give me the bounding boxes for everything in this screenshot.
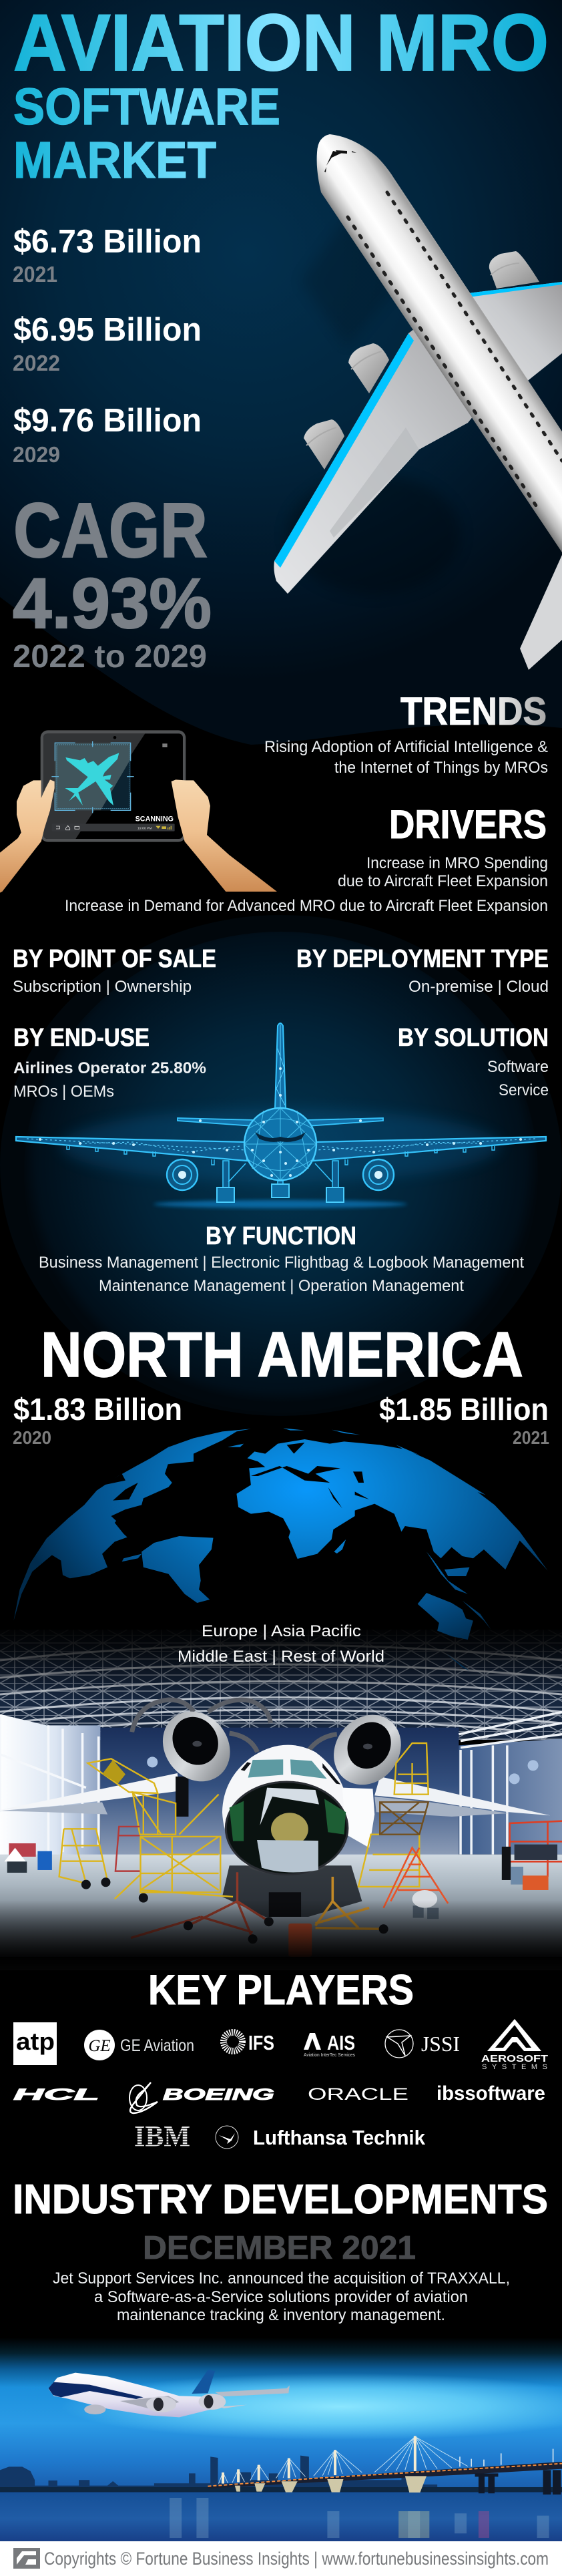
engine 3	[304, 419, 344, 470]
inland seas	[104, 1443, 369, 1523]
panel: by solution	[398, 1024, 549, 1099]
left hand and arm	[0, 779, 55, 893]
right wall	[459, 1738, 562, 1855]
title line 2: SOFTWARE	[13, 78, 280, 136]
CAGR block	[13, 487, 212, 675]
CAGR period: 2022 to 2029	[13, 639, 207, 675]
dominant share: Airlines Operator 25.80%	[13, 1059, 206, 1077]
logo: Aerosoft Systems: SYSTEMS	[482, 2063, 547, 2071]
airliner wing	[120, 2396, 179, 2410]
cream bridge piers	[235, 2476, 427, 2493]
tablet screen	[43, 733, 183, 839]
tablet status icons	[156, 826, 172, 830]
main wings	[16, 1137, 546, 1161]
orange ladder	[384, 1848, 448, 1908]
value 2029: $9.76 Billion	[13, 403, 202, 439]
fuselage nose	[222, 1745, 348, 1875]
driver text line 3: Increase in Demand for Advanced MRO due to Aircraft Fleet Expansion	[65, 897, 548, 915]
logo: HCL: HCL	[13, 2086, 99, 2104]
deck lights	[208, 2464, 562, 2487]
heading: BY FUNCTION	[206, 1222, 356, 1250]
value 2021: $1.85 Billion	[379, 1392, 549, 1427]
title	[13, 0, 549, 189]
cockpit windows	[324, 150, 356, 172]
icon: glowing wireframe airplane	[16, 1023, 546, 1208]
title line 3: MARKET	[13, 132, 216, 189]
left wing	[0, 1773, 179, 1810]
lamp posts	[460, 2449, 553, 2466]
logo: Oracle: ORACLE	[308, 2085, 408, 2104]
warm reflection	[398, 2511, 429, 2538]
airliner	[48, 2370, 290, 2417]
left equipment	[4, 1843, 52, 1873]
cockpit side windows	[241, 1762, 340, 1785]
panel: industry developments	[13, 2177, 548, 2324]
left wall	[0, 1714, 100, 1865]
tablet nav bar	[52, 823, 175, 832]
market size figures	[13, 224, 202, 467]
trend text line 2: the Internet of Things by MROs	[334, 759, 548, 777]
fuselage	[317, 134, 562, 552]
hangar ceiling	[0, 1630, 562, 1740]
hangar interior scene	[0, 1700, 562, 1957]
logo: AIS: AIS	[327, 2031, 355, 2054]
yellow scaffold	[59, 1743, 429, 1899]
items: Subscription | Ownership	[13, 978, 192, 996]
development text line 2: a Software-as-a-Service solutions provider of aviation	[94, 2288, 468, 2306]
logo: Boeing: BOEING	[163, 2086, 274, 2104]
regional figures	[13, 1392, 549, 1448]
water	[0, 2491, 562, 2541]
aircraft jack left	[131, 1872, 269, 1939]
heading: BY END-USE	[13, 1024, 150, 1052]
purple reflection	[479, 2511, 489, 2538]
trend text line 1: Rising Adoption of Artificial Intelligence &	[264, 738, 548, 756]
orange canister	[288, 1923, 312, 1957]
logo: AIS: Aviation InterTec Services	[304, 2053, 355, 2058]
scan square	[55, 743, 131, 810]
panel: by end-use	[13, 1024, 206, 1101]
sky bright band	[61, 2373, 562, 2440]
item software: Software	[487, 1058, 549, 1076]
white cover	[412, 1890, 437, 1908]
panel: drivers	[65, 802, 548, 915]
development text line 1: Jet Support Services Inc. announced the acquisition of TRAXXALL,	[53, 2269, 510, 2287]
cabin windows lower row	[348, 217, 536, 506]
panel: trends	[264, 690, 548, 777]
regions line 1: Europe | Asia Pacific	[202, 1622, 361, 1640]
airliner stabilizer	[215, 2386, 290, 2396]
logo: atp: atp	[16, 2028, 55, 2055]
wall lights	[152, 1762, 533, 1779]
left steel columns	[0, 1716, 99, 1852]
left wing underside	[0, 1802, 107, 1815]
tail fin	[275, 1023, 286, 1109]
islands of Asia Pacific	[427, 1551, 491, 1671]
brown scaffold	[380, 1802, 429, 1835]
year 2022: 2022	[13, 351, 60, 375]
item service: Service	[499, 1081, 549, 1099]
left engine	[156, 1709, 237, 1784]
opened radome bay	[226, 1782, 348, 1875]
tablet frame	[41, 730, 186, 842]
aircraft jack right	[316, 1877, 384, 1929]
under fuselage shadow	[222, 1865, 362, 1917]
cabin windows upper row	[387, 192, 562, 461]
city skyline	[0, 2456, 562, 2493]
CAGR value: 4.93%	[13, 563, 212, 643]
floor	[0, 1855, 562, 1957]
right radome panel	[342, 1788, 374, 1848]
heading: drivers: DRIVERS	[389, 802, 547, 847]
red scaffold frame	[115, 1827, 139, 1871]
engine reverser doors	[132, 1700, 337, 1752]
dark bridge piers	[475, 2470, 561, 2495]
mesh nodes	[40, 1069, 521, 1175]
back wall	[100, 1728, 459, 1857]
engine 2	[348, 343, 389, 393]
South America	[142, 1536, 214, 1603]
Central America	[122, 1554, 142, 1561]
paint cans	[413, 1905, 439, 1919]
right wing underside	[374, 1797, 509, 1817]
airliner engine 1	[146, 2396, 176, 2412]
engine 1	[489, 251, 539, 289]
menu dots	[162, 744, 168, 747]
items line 1: Business Management | Electronic Flightbag & Logbook Management	[39, 1254, 524, 1272]
cockpit windshield	[255, 1132, 306, 1142]
radar dish	[271, 1813, 308, 1846]
panel: by function	[39, 1222, 524, 1295]
bridge deck	[208, 2462, 562, 2489]
logo: GE Aviation: GE	[88, 2037, 111, 2055]
logo: Aerosoft Systems: AEROSOFT	[481, 2053, 548, 2064]
airliner engine 2	[198, 2394, 226, 2410]
hangar bottom fade	[0, 1900, 562, 1970]
sky and bridge scene	[0, 2338, 562, 2541]
items: MROs | OEMs	[13, 1083, 114, 1101]
logo: ibs software: ibssoftware	[437, 2082, 545, 2104]
bridge cables	[219, 2436, 468, 2484]
icon: hands holding tablet	[0, 730, 277, 893]
Australia	[418, 1593, 473, 1640]
other regions list	[178, 1622, 384, 1666]
airliner tail fin	[192, 2370, 215, 2394]
Madagascar	[334, 1539, 346, 1553]
hangar photo illustration	[0, 1623, 562, 1970]
icon: airplane top view	[274, 134, 562, 670]
logo: IFS	[224, 2031, 274, 2054]
fuselage	[244, 1108, 316, 1180]
footer background	[0, 2541, 562, 2576]
yellow scaffold plate	[102, 1760, 125, 1783]
panel: by point of sale	[13, 945, 216, 996]
year 2021: 2021	[13, 262, 57, 287]
panel: by deployment type	[296, 945, 549, 996]
black duct	[176, 1777, 188, 1817]
North America	[13, 1429, 251, 1621]
heading: trends: TRENDS	[400, 690, 547, 733]
logo: GE Aviation	[84, 2030, 194, 2060]
right wing	[468, 282, 562, 383]
driver text line 1: Increase in MRO Spending	[366, 854, 548, 872]
logo: IFS: IFS	[248, 2031, 274, 2054]
airliner engine 3	[84, 2404, 105, 2414]
logo: JSSI	[385, 2030, 460, 2058]
date: DECEMBER 2021	[143, 2230, 416, 2266]
logo: AIS	[304, 2031, 355, 2058]
development text line 3: maintenance tracking & inventory management.	[117, 2306, 445, 2324]
left wing	[274, 314, 507, 594]
left engine	[167, 1159, 198, 1190]
landing gear	[223, 1161, 338, 1197]
tail wing	[520, 555, 562, 670]
cockpit windows	[248, 1759, 327, 1779]
airliner livery	[48, 2382, 144, 2399]
year 2029: 2029	[13, 442, 60, 467]
logo: GE Aviation: GE Aviation	[120, 2036, 194, 2055]
scanned plane	[65, 753, 119, 805]
CAGR label: CAGR	[13, 487, 208, 574]
tablet status text: 19:00 PM	[137, 826, 152, 830]
heading: key players: KEY PLAYERS	[148, 1967, 414, 2014]
bridge towers	[223, 2436, 415, 2484]
year 2021: 2021	[513, 1427, 549, 1448]
logo: IBM: IBM	[134, 2120, 190, 2153]
foil insulation	[260, 1788, 319, 1825]
camera dot	[113, 736, 116, 739]
nose wheels	[269, 1892, 301, 1917]
logo: JSSI: JSSI	[421, 2032, 460, 2056]
shoreline	[0, 2487, 562, 2492]
panel: top navy background	[0, 0, 562, 745]
airliner lower stabilizer	[219, 2405, 248, 2408]
items line 2: Maintenance Management | Operation Management	[99, 1277, 464, 1295]
logo: atp	[13, 2022, 57, 2065]
regions line 2: Middle East | Rest of World	[178, 1648, 384, 1666]
wing flap fairings	[67, 1146, 495, 1165]
water reflections	[176, 2498, 543, 2538]
logo: Boeing	[129, 2082, 274, 2113]
panel: glow circle background	[0, 915, 562, 1416]
right engine	[363, 1159, 394, 1190]
driver text line 2: due to Aircraft Fleet Expansion	[338, 872, 548, 890]
value 2021: $6.73 Billion	[13, 224, 202, 260]
Arctic islands	[228, 1428, 486, 1495]
logo: Lufthansa Technik: Lufthansa Technik	[253, 2126, 426, 2149]
heading: BY POINT OF SALE	[13, 945, 216, 973]
right hand and arm	[172, 779, 277, 892]
chart: world globe map	[13, 1428, 548, 1671]
items: On-premise | Cloud	[408, 978, 549, 996]
hangar top fade	[0, 1623, 562, 1700]
heading: INDUSTRY DEVELOPMENTS	[13, 2177, 548, 2223]
icon: company logo	[13, 2548, 40, 2569]
Africa and Eurasia	[236, 1439, 548, 1571]
company logos	[13, 2019, 548, 2153]
right engine	[327, 1712, 408, 1787]
year 2020: 2020	[13, 1427, 51, 1448]
logo: Aerosoft Systems	[481, 2019, 548, 2071]
red tool shelves	[502, 1821, 562, 1890]
value 2020: $1.83 Billion	[13, 1392, 182, 1427]
panel: footer	[0, 2541, 562, 2576]
jack wheels	[86, 1882, 384, 1939]
green bay panels	[230, 1799, 346, 1841]
SCANNING label: SCANNING	[135, 815, 174, 823]
value 2022: $6.95 Billion	[13, 312, 202, 348]
sky	[0, 2338, 562, 2493]
right steel columns	[459, 1712, 562, 1855]
lower panel	[257, 1840, 318, 1872]
airliner body	[48, 2373, 226, 2417]
horizontal stabilizers	[178, 1118, 383, 1126]
right wing	[374, 1777, 550, 1815]
